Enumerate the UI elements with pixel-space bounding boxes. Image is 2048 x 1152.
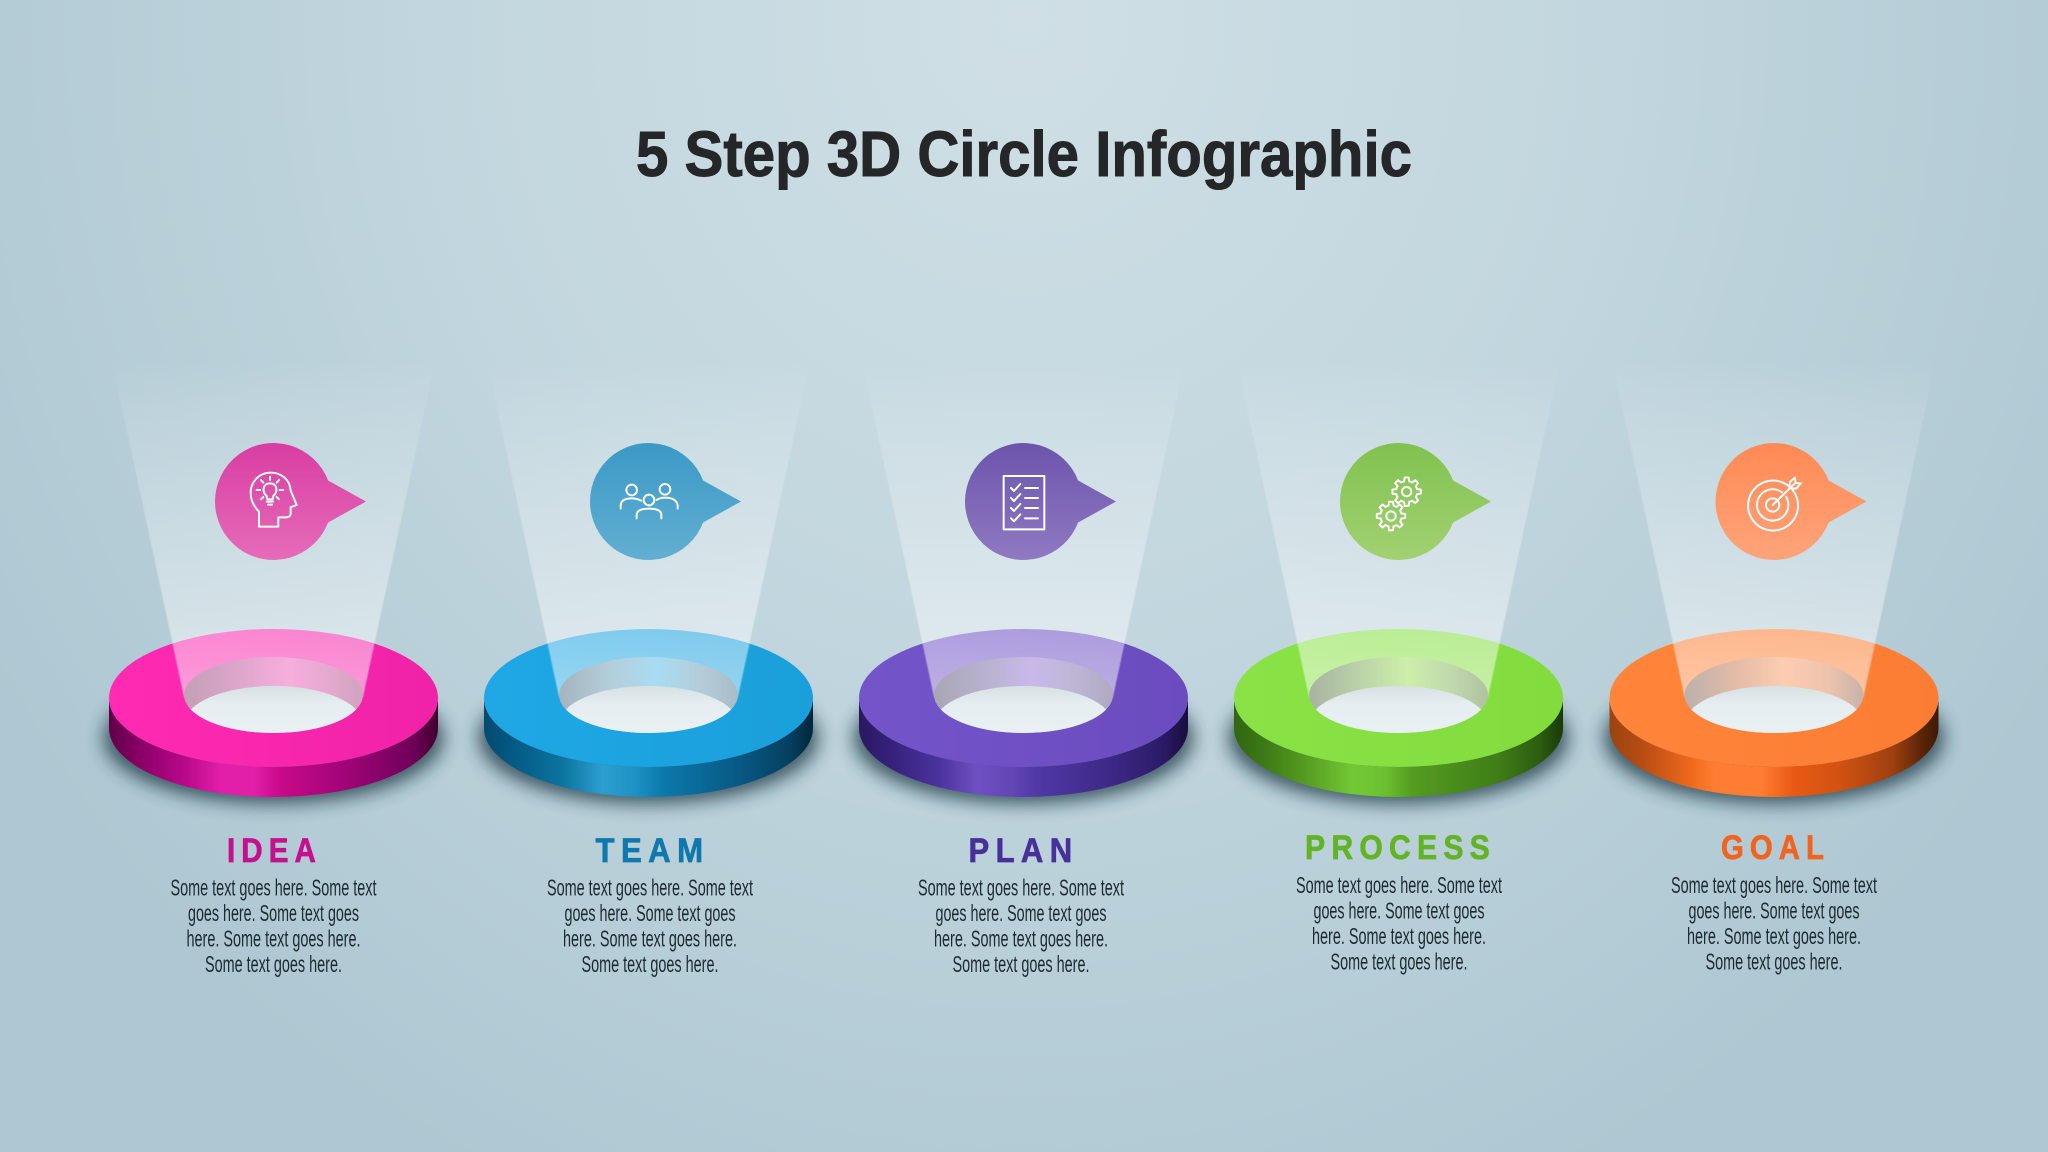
body: idea xyxy=(170,874,377,977)
body: idea: Some text goes here. xyxy=(205,951,342,977)
body: team: Some text goes here. xyxy=(582,951,718,977)
body: goal: goes here. Some text goes xyxy=(1688,898,1860,924)
body: goal: Some text goes here. Some text xyxy=(1671,872,1877,898)
body: process: goes here. Some text goes xyxy=(1314,898,1484,924)
disc shadow xyxy=(1604,672,1944,804)
body: plan: Some text goes here. xyxy=(952,951,1090,977)
heading: team: TEAM xyxy=(596,832,710,870)
disc shadow xyxy=(1228,672,1568,804)
body: process: Some text goes here. Some text xyxy=(1296,872,1502,898)
hole wall xyxy=(559,657,738,733)
hole wall xyxy=(184,657,363,733)
disc side xyxy=(484,698,813,797)
hole floor xyxy=(190,686,356,733)
icon: target with arrow xyxy=(1748,478,1801,531)
hole wall xyxy=(1684,657,1864,733)
disc side xyxy=(1610,698,1938,797)
disc shadow xyxy=(478,672,818,804)
callout xyxy=(215,443,366,560)
body: idea: goes here. Some text goes xyxy=(188,900,359,926)
body: team xyxy=(547,874,753,977)
body: process: here. Some text goes here. xyxy=(1312,923,1486,949)
icon: people xyxy=(621,484,678,518)
icon: gears xyxy=(1377,477,1421,530)
heading: idea: IDEA xyxy=(227,832,322,870)
step 2: team xyxy=(478,360,818,804)
icon: head with light bulb xyxy=(251,473,297,527)
label: plan xyxy=(918,832,1124,977)
body: process: Some text goes here. xyxy=(1330,948,1468,974)
label: process xyxy=(1296,829,1502,974)
light beam xyxy=(862,360,1185,697)
step 3: plan xyxy=(854,360,1194,804)
hole floor xyxy=(941,686,1106,733)
light beam xyxy=(1612,360,1936,697)
disc side xyxy=(859,698,1188,797)
body: team: Some text goes here. Some text xyxy=(547,874,753,900)
heading: process: PROCESS xyxy=(1305,829,1496,867)
disc top xyxy=(1610,629,1938,767)
label: team xyxy=(547,832,753,977)
disc shadow xyxy=(854,672,1194,804)
hole floor xyxy=(1316,686,1481,733)
light beam xyxy=(112,360,435,697)
disc top xyxy=(484,629,813,767)
disc top xyxy=(859,629,1188,767)
light beam xyxy=(1237,360,1560,697)
light beam xyxy=(487,360,810,697)
step 5: goal xyxy=(1604,360,1944,804)
disc top xyxy=(109,629,438,767)
body: plan: here. Some text goes here. xyxy=(934,926,1108,952)
hole wall xyxy=(934,657,1113,733)
label: goal xyxy=(1671,829,1877,974)
heading: plan: PLAN xyxy=(968,832,1078,870)
disc side xyxy=(1234,698,1563,797)
body: plan xyxy=(918,874,1124,977)
step 4: process xyxy=(1228,360,1568,804)
disc shadow xyxy=(104,672,444,804)
callout xyxy=(965,443,1116,560)
body: idea: here. Some text goes here. xyxy=(186,926,360,952)
disc top xyxy=(1234,629,1563,767)
body: idea: Some text goes here. Some text xyxy=(170,874,377,900)
heading: goal: GOAL xyxy=(1721,829,1830,867)
hole floor xyxy=(566,686,732,733)
body: goal: Some text goes here. xyxy=(1706,948,1842,974)
body: plan: goes here. Some text goes xyxy=(936,900,1106,926)
body: goal xyxy=(1671,872,1877,974)
body: goal: here. Some text goes here. xyxy=(1687,923,1861,949)
body: plan: Some text goes here. Some text xyxy=(918,874,1124,900)
hole wall xyxy=(1309,657,1488,733)
body: process xyxy=(1296,872,1502,974)
body: team: here. Some text goes here. xyxy=(563,926,737,952)
callout xyxy=(1340,443,1491,560)
hole floor xyxy=(1692,686,1857,733)
body: team: goes here. Some text goes xyxy=(564,900,736,926)
callout xyxy=(1715,443,1866,560)
title: 5 Step 3D Circle Infographic xyxy=(636,118,1412,190)
step 1: idea xyxy=(104,360,444,804)
label: idea xyxy=(170,832,377,977)
disc side xyxy=(109,698,438,797)
callout xyxy=(590,443,741,560)
icon: checklist xyxy=(1004,476,1044,529)
